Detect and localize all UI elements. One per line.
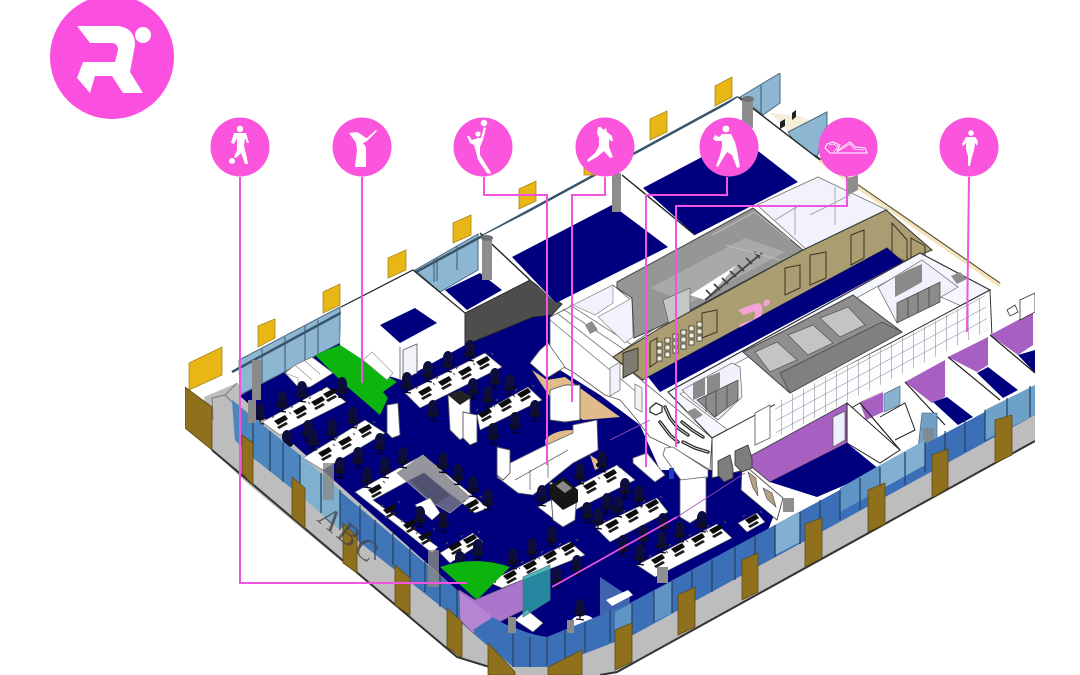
desk row 6 — [592, 485, 669, 556]
timber fins — [185, 387, 1012, 675]
grey columns — [248, 360, 794, 633]
desk row 8 — [634, 511, 732, 577]
back windows — [239, 73, 1000, 395]
callout leader lines — [240, 177, 969, 587]
upper core roof — [573, 175, 887, 343]
meeting room and golf green — [285, 270, 465, 415]
icon: basketball player — [454, 118, 512, 176]
lower core roof — [668, 253, 990, 438]
tan corridor wall — [613, 210, 932, 380]
large blue rooms — [480, 96, 820, 303]
concrete slab — [204, 383, 1035, 675]
U-shaped meeting desk — [355, 447, 494, 572]
desk row 7 — [486, 526, 585, 588]
tan wall doors — [623, 223, 925, 378]
desk row 9 — [738, 511, 765, 532]
icon: race circuit — [818, 118, 878, 176]
slab lettering: ABC — [312, 500, 387, 571]
grid of wall tiles — [657, 322, 702, 361]
brand R on wall — [738, 298, 770, 338]
purple meeting room — [741, 403, 900, 520]
gold wall panels — [189, 77, 732, 390]
logo — [50, 0, 174, 119]
desk row 1 — [254, 377, 348, 451]
stair core — [617, 208, 803, 338]
icon: runner — [940, 118, 998, 176]
isometric office floor plan — [185, 73, 1035, 675]
desk row 2 — [303, 407, 386, 478]
dark grey wall — [465, 280, 562, 345]
green lounge area — [440, 561, 510, 600]
central core white wall — [550, 285, 712, 470]
icon: handball player — [576, 118, 634, 176]
icon: golfer — [332, 118, 392, 176]
white stepped seating — [497, 343, 708, 523]
icon: football player — [210, 118, 270, 176]
locker wall — [712, 290, 992, 478]
perimeter rooms behind purple walls — [860, 293, 1035, 465]
desk row 5 — [536, 451, 635, 523]
workstation rows — [254, 340, 765, 588]
back wall line — [232, 97, 738, 372]
left facade glazing — [232, 400, 490, 648]
front lounge furniture — [515, 577, 633, 632]
tan floor areas — [532, 370, 620, 470]
lower core inner rooms — [680, 260, 967, 430]
black pillar caps — [448, 390, 578, 510]
central blue corridor — [648, 248, 903, 392]
teal glass screen — [523, 565, 550, 617]
purple tinted glazing — [459, 580, 523, 633]
black wall art — [650, 403, 708, 452]
blue floor marker — [669, 468, 674, 479]
white pillars — [387, 385, 580, 527]
desk row 3 — [401, 340, 502, 421]
blue carpet floor — [240, 313, 780, 640]
front facade glazing — [473, 385, 1035, 667]
desk row 4 — [476, 374, 542, 444]
copiers — [718, 445, 752, 482]
icon: boxer — [700, 118, 758, 176]
